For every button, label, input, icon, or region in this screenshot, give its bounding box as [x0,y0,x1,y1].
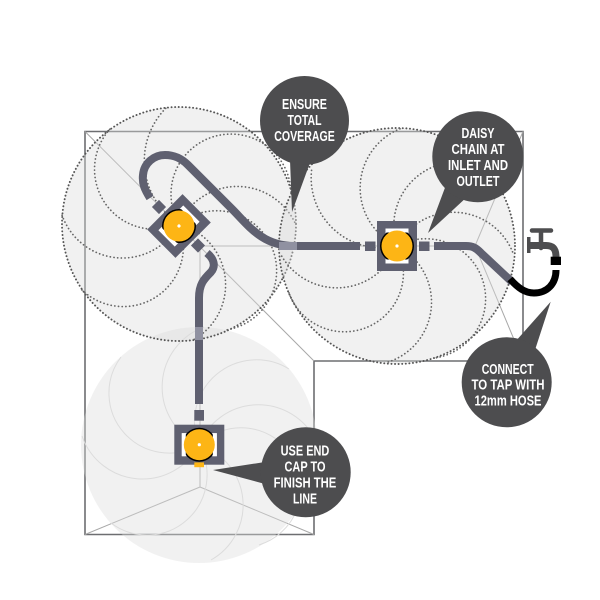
callout: daisy chain at inlet and outlet: OUTLET [456,174,500,190]
callout: connect to tap with 12mm hose [462,302,552,427]
connector: right inlet [365,242,376,251]
callout: ensure total coverage: COVERAGE [274,129,335,145]
callout: ensure total coverage [260,76,349,212]
coverage area: top-left sprinkler [62,107,296,341]
connector: top-left outlet [191,238,205,253]
connector: right outlet [419,242,430,251]
connector: top-left inlet [152,200,166,214]
icon: tap [527,230,561,265]
callout: daisy chain at inlet and outlet: DAISY [462,126,495,142]
callout: use end cap to finish the line: FINISH THE [274,476,337,492]
callout: daisy chain at inlet and outlet [428,111,523,233]
callout: connect to tap with 12mm hose: CONNECT [482,362,534,378]
pipe: right sprinkler to hose [434,246,512,282]
callout: daisy chain at inlet and outlet: INLET AND [448,158,508,174]
callout: use end cap to finish the line: USE END [281,444,329,460]
callout: ensure total coverage: TOTAL [288,113,322,129]
callout: connect to tap with 12mm hose: TO TAP WITH [472,378,544,394]
house outline [85,132,523,534]
callout: use end cap to finish the line [213,427,351,517]
coverage area: bottom sprinkler [81,327,317,563]
pipe: top-left sprinkler to bottom sprinkler [195,253,214,404]
callout: use end cap to finish the line: LINE [293,491,317,507]
callout: daisy chain at inlet and outlet: CHAIN AT [452,142,505,158]
sprinkler: top-left [147,194,211,258]
coverage area: right sprinkler [279,128,515,364]
callout: use end cap to finish the line: CAP TO [284,460,326,476]
sprinkler: bottom with end cap [174,425,224,467]
hose: 12mm black hose to tap [510,270,556,293]
callout: connect to tap with 12mm hose: 12mm HOSE [474,394,542,410]
sprinkler: right [377,221,417,271]
callout: ensure total coverage: ENSURE [282,97,327,113]
connector: bottom inlet [194,410,204,421]
pipe: top-left sprinkler to right sprinkler [143,155,360,250]
